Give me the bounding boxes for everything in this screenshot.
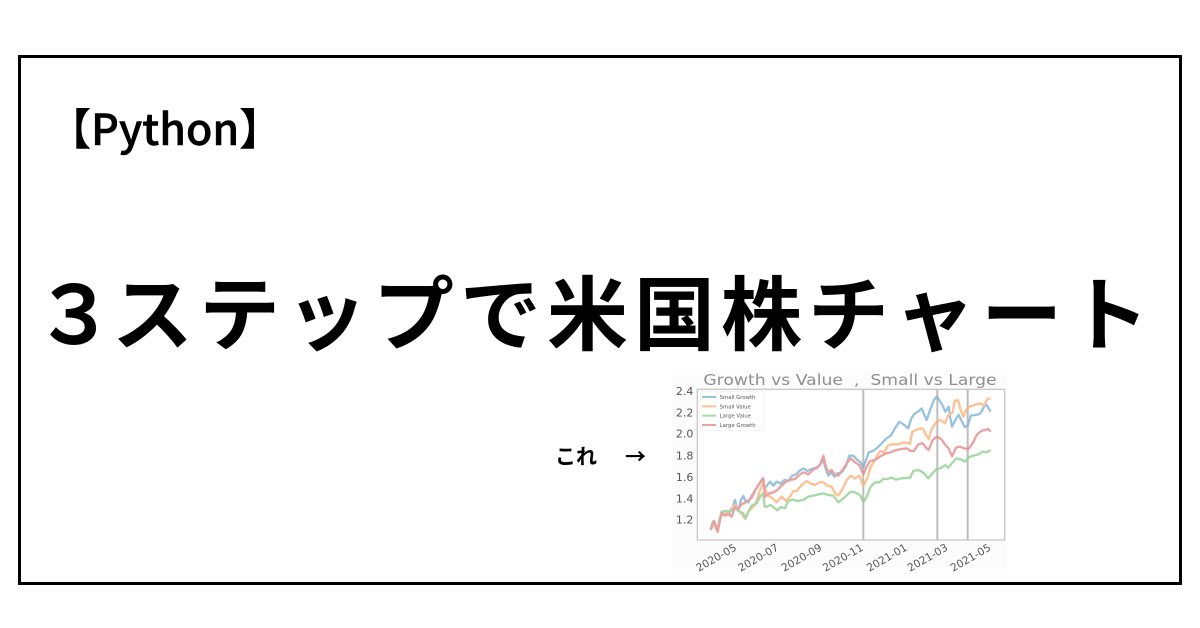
- series: small growth: [711, 397, 991, 531]
- y axis labels: 1.8: [676, 449, 693, 462]
- vertical markers: [863, 389, 968, 540]
- label: kore with arrow: これ →: [555, 441, 646, 471]
- series: small value: [711, 398, 991, 532]
- x axis labels: 2021-03: [905, 541, 950, 575]
- legend: Small Growth: [720, 395, 755, 401]
- legend: Large Growth: [720, 423, 756, 429]
- series: large value: [711, 450, 991, 531]
- y axis labels: [676, 385, 693, 527]
- y axis labels: 1.6: [676, 471, 693, 484]
- x axis labels: 2020-11: [820, 541, 866, 575]
- x axis labels: [694, 541, 993, 575]
- legend: Small Value: [720, 404, 751, 410]
- y axis labels: 2.2: [676, 406, 693, 419]
- y axis labels: 2.0: [676, 428, 693, 441]
- x axis labels: 2020-07: [736, 541, 781, 575]
- line chart: growth vs value: [676, 371, 1006, 575]
- x axis labels: 2021-01: [864, 541, 910, 575]
- x axis labels: 2020-05: [694, 541, 739, 575]
- plot axes: [697, 389, 1005, 540]
- y axis labels: 2.4: [676, 385, 693, 398]
- legend: [700, 392, 763, 430]
- legend: Large Value: [720, 414, 751, 420]
- x axis labels: 2021-05: [948, 541, 993, 575]
- series lines: [711, 397, 991, 532]
- series: large growth: [711, 429, 991, 531]
- chart title: Growth vs Value , Small vs Large: [703, 371, 997, 389]
- tag: Python: 【Python】: [48, 96, 282, 158]
- y axis labels: 1.4: [676, 492, 693, 505]
- x axis labels: 2020-09: [779, 541, 824, 575]
- y axis labels: 1.2: [676, 514, 693, 527]
- title: ３ステップで米国株チャート: [34, 251, 1155, 368]
